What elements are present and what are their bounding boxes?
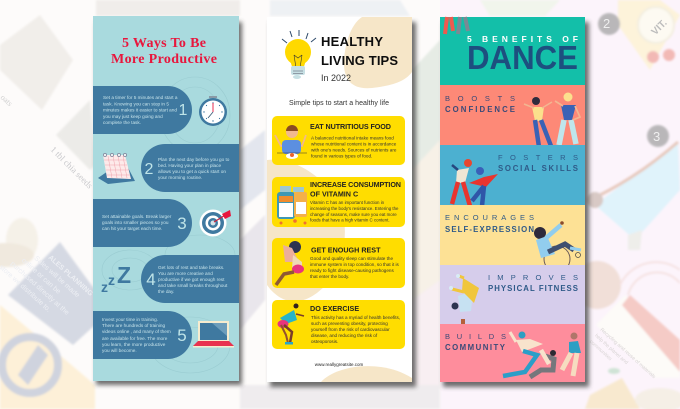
band: builds community: BUILDS (445, 332, 506, 341)
step 4 pill: 4 (146, 270, 156, 289)
band: header: 5 BENEFITS OF (467, 34, 578, 44)
card: get enough rest: immune system in top condition, so that it is (310, 262, 400, 267)
step 1 pill: task. Knowing you can stop in 5 (103, 102, 169, 106)
card: do exercise: osteoporosis. (311, 339, 338, 344)
step 4 pill: You are more creative and (158, 271, 213, 276)
step 1 pill (93, 86, 192, 134)
step 4 pill: and take small breaks throughout (158, 283, 228, 288)
step 5 pill: you will become. (102, 348, 137, 353)
icon: sleeping Z letters: Z (117, 262, 131, 288)
band: fosters social skills: SOCIAL SKILLS (498, 164, 578, 173)
background collage: 2 (603, 16, 610, 31)
step 5 pill: Invest your time in training. (102, 317, 158, 322)
icon: dancers' legs (445, 17, 468, 34)
card: eat nutritious food: EAT NUTRITIOUS FOOD (310, 122, 391, 131)
step 4 pill: productive if we got enough rest (158, 277, 225, 282)
step 4 pill: the day. (158, 289, 174, 294)
band: improves physical fitness: PHYSICAL FITNESS (488, 284, 578, 293)
background collage: 1 tbl chia seeds (49, 144, 95, 191)
step 3 pill: goals into smaller pieces so you (102, 220, 169, 225)
card: get enough rest (272, 238, 405, 288)
background collage: 3 (653, 129, 660, 144)
step 2 pill: Plan the next day before you go to (158, 157, 230, 162)
step 4 pill: Get lots of rest and take breaks. (158, 265, 224, 270)
card: do exercise: such as preventing obesity, protecting (311, 321, 388, 326)
website footer: www.reallygreatsite.com (315, 362, 364, 367)
card: eat nutritious food: A balanced nutritional intake means food (311, 136, 394, 140)
band: fosters social skills: FOSTERS (498, 153, 578, 162)
step 2 pill (141, 144, 239, 192)
background collage: ALES PLANNING (47, 254, 94, 298)
title: In 2022 (321, 73, 351, 83)
band: builds community: COMMUNITY (445, 343, 506, 352)
title (321, 34, 398, 83)
card: get enough rest: Good and quality sleep can stimulate the (310, 256, 393, 261)
band: encourages self-expression (440, 205, 585, 272)
band: improves physical fitness (440, 265, 585, 328)
icon: boy eating (275, 125, 307, 159)
band: header: DANCE (467, 39, 578, 76)
step 1 pill: Set a timer for 5 minutes and start a (103, 95, 178, 100)
card: vitamin C: change of seasons, make sure you eat more (310, 212, 397, 217)
icon: clock (199, 96, 227, 126)
background collage: VIT. (650, 18, 670, 38)
band: boosts confidence: CONFIDENCE (445, 105, 515, 114)
icon: laptop (193, 321, 234, 348)
band: encourages self-expression: ENCOURAGES (445, 213, 534, 222)
icon: exercising man (278, 304, 304, 344)
title: 5 Ways To Be (122, 36, 206, 51)
band: builds community (440, 324, 585, 382)
icon: dancing couple (452, 159, 498, 206)
band: boosts confidence (440, 85, 585, 147)
card: do exercise: DO EXERCISE (310, 304, 359, 313)
step 2 pill: allows you to get a quick start on (158, 169, 226, 174)
step 1 pill: you may just keep going and (103, 114, 163, 119)
card: do exercise (272, 300, 405, 349)
icon: two dancers (524, 92, 580, 147)
card: eat nutritious food: found in various types of food. (311, 154, 372, 158)
step 3 pill: Set attainable goals. Break larger (102, 214, 172, 219)
icon: vitamin bottles (277, 186, 307, 224)
card: do exercise: This activity has a myriad of health benefits, (311, 315, 400, 320)
step 3 pill: can hit your target each time. (102, 226, 162, 231)
icon: three community dancers (503, 332, 581, 377)
background collage: communities (588, 339, 613, 362)
beige blob shapes (267, 17, 412, 382)
card: eat nutritious food (272, 116, 405, 165)
step 5 pill: There are hundreds of training (102, 323, 165, 328)
icon: sleeping Z letters: z (101, 279, 108, 295)
step 5 pill: 5 (177, 326, 187, 345)
topographic contour decoration (102, 77, 235, 373)
step 2 pill: bed. Having your plan in place (158, 163, 221, 168)
card: vitamin C: Vitamin C has an important function in (310, 200, 385, 205)
icon: resting woman (276, 241, 304, 285)
card: get enough rest: that enter the body. (310, 274, 349, 279)
title: More Productive (111, 52, 217, 67)
step 5 pill: you learn, the more productive (102, 342, 166, 347)
card: vitamin C: OF VITAMIN C (310, 190, 358, 198)
background collage: purchased directly at the (9, 261, 70, 317)
background collage: Sales will be made (33, 255, 81, 299)
step 3 pill (93, 199, 192, 247)
step 4 pill (141, 255, 239, 303)
card: do exercise: yourself from the risk of cardiovascular (311, 327, 390, 332)
card: get enough rest: GET ENOUGH REST (311, 246, 381, 254)
icon: sleeping Z letters: z (108, 272, 115, 288)
card: vitamin C: increasing the body's resistance. Entering the (310, 206, 399, 211)
icon: target (200, 210, 231, 236)
band: improves physical fitness: IMPROVES (488, 273, 578, 282)
band: boosts confidence: BOOSTS (445, 94, 515, 103)
step 1 pill: 1 (179, 102, 188, 119)
panel: healthy living tips (267, 17, 412, 382)
panel shadows (96, 22, 589, 387)
panel: 5 ways to be more productive (93, 16, 239, 381)
card: vitamin C (272, 177, 405, 227)
card: do exercise: disease, and reducing the risk of (311, 333, 378, 338)
step 1 pill: complete the task. (103, 120, 141, 125)
card: vitamin C: INCREASE CONSUMPTION (310, 180, 401, 189)
step 3 pill: 3 (177, 214, 187, 233)
panel: 5 benefits of dance (440, 17, 585, 382)
icon: breakdancer (449, 274, 479, 328)
background collage: Recycling and reuse of materials (599, 327, 657, 380)
step 5 pill (93, 311, 192, 359)
background collage: help the planet and (593, 333, 629, 366)
band: encourages self-expression: SELF-EXPRESSION (445, 225, 534, 234)
card: eat nutritious food: whose nutritional content is in accordance (311, 142, 397, 146)
band: fosters social skills (440, 145, 585, 206)
card: eat nutritious food: with one's needs. Sources of nutrients are (311, 148, 397, 152)
card: get enough rest: ready to fight disease-causing pathogens (310, 268, 394, 273)
title: LIVING TIPS (321, 53, 398, 68)
icon: sleeping Z letters (101, 262, 131, 295)
icon: wheelchair dancer (534, 221, 581, 272)
title: HEALTHY (321, 34, 383, 49)
band: header (440, 17, 585, 85)
title (111, 36, 217, 67)
background collage: online or can be (20, 257, 62, 296)
step 5 pill: videos online , and many of them (102, 329, 171, 334)
subtitle: Simple tips to start a healthy life (289, 100, 389, 107)
card: vitamin C: foods that have a high vitamin C content. (310, 218, 390, 222)
step 2 pill: your morning routine. (158, 175, 202, 180)
icon: light bulb (282, 30, 316, 79)
step 5 pill: are available for free. The more (102, 336, 168, 341)
step 2 pill: 2 (145, 161, 154, 178)
step 1 pill: minutes makes it easier to start and (103, 108, 177, 112)
icon: calendar (98, 153, 135, 184)
